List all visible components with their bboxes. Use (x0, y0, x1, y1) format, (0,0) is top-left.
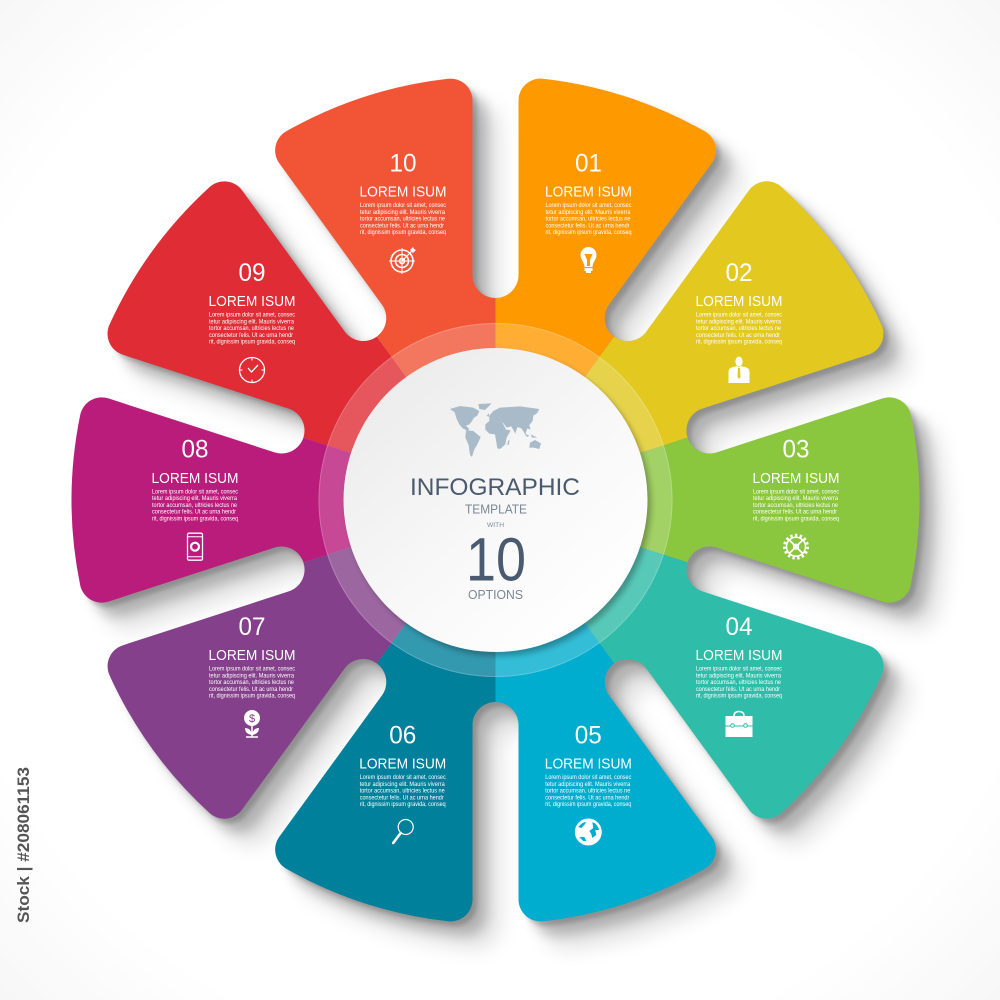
subtitle: TEMPLATE: TEMPLATE (465, 502, 527, 516)
segment 08: 08 (182, 436, 208, 464)
segment 07: tetur adipiscing elit. Mauris viverra (209, 673, 295, 679)
segment 07 (70, 370, 496, 841)
segment 01 (496, 79, 716, 500)
segment 06: 06 (389, 722, 416, 750)
segment 09: 09 (238, 259, 266, 287)
centre disc shadow (347, 352, 651, 656)
segment 10: 10 (390, 150, 416, 178)
segment 08: consectetur felis. Ut ac urna hendr (152, 510, 236, 516)
segment 09: consectetur felis. Ut ac urna hendr (209, 333, 293, 339)
icon: target (389, 247, 416, 274)
segment 04: 04 (726, 613, 753, 641)
segment 09: tortor accumsan, ultricies lectus ne (209, 326, 295, 332)
segment 08: Lorem ipsum dolor sit amet, consec (152, 489, 238, 495)
icon: briefcase (726, 712, 752, 737)
segment 06: Lorem ipsum dolor sit amet, consec (360, 775, 446, 781)
centre glass ring (318, 323, 672, 677)
segment 09: Lorem ipsum dolor sit amet, consec (209, 313, 295, 319)
segment 10: rit, dignissim ipsum gravida, conseq (360, 230, 446, 236)
segment 09: tetur adipiscing elit. Mauris viverra (209, 319, 295, 325)
segment 08: LOREM ISUM (152, 471, 238, 487)
icon: money plant: $ (249, 713, 255, 725)
icon: smartphone (188, 533, 202, 560)
segment 08 (27, 290, 496, 630)
segment 04: tetur adipiscing elit. Mauris viverra (696, 673, 782, 679)
segment 07: LOREM ISUM (208, 648, 296, 664)
segment 07: consectetur felis. Ut ac urna hendr (209, 687, 293, 693)
segment 05 (317, 500, 743, 970)
segment 03 (496, 370, 964, 710)
segment 06: consectetur felis. Ut ac urna hendr (360, 795, 444, 801)
label: WITH: WITH (487, 523, 504, 529)
segment 02: 02 (726, 259, 752, 287)
segment 09: rit, dignissim ipsum gravida, conseq (209, 340, 295, 346)
segment 06: LOREM ISUM (359, 757, 446, 773)
big number 10: 10 (466, 526, 526, 594)
segment 07: Lorem ipsum dolor sit amet, consec (209, 667, 295, 673)
segment 08: tortor accumsan, ultricies lectus ne (152, 503, 238, 509)
segment 01: tortor accumsan, ultricies lectus ne (546, 217, 631, 223)
icon: businessman (728, 356, 750, 383)
icon: money plant (244, 710, 260, 737)
segment 05: tortor accumsan, ultricies lectus ne (545, 789, 631, 795)
segment 04 (427, 500, 896, 840)
segment 06: tortor accumsan, ultricies lectus ne (360, 789, 445, 795)
segment 04: Lorem ipsum dolor sit amet, consec (696, 667, 782, 673)
segment 03: consectetur felis. Ut ac urna hendr (753, 510, 837, 516)
segment 06: tetur adipiscing elit. Mauris viverra (360, 782, 445, 788)
segment 05: rit, dignissim ipsum gravida, conseq (545, 802, 631, 808)
icon: clock (240, 358, 264, 382)
label: OPTIONS: OPTIONS (468, 588, 523, 602)
segment 08: tetur adipiscing elit. Mauris viverra (152, 496, 238, 502)
segment 10: tetur adipiscing elit. Mauris viverra (360, 210, 446, 216)
segment 10: consectetur felis. Ut ac urna hendr (360, 223, 444, 229)
segment 03: Lorem ipsum dolor sit amet, consec (753, 489, 839, 495)
segment 10: LOREM ISUM (360, 185, 446, 201)
segment 05: 05 (575, 722, 602, 750)
segment 07: tortor accumsan, ultricies lectus ne (209, 680, 295, 686)
segment 03: tortor accumsan, ultricies lectus ne (753, 503, 839, 509)
centre disc (344, 348, 648, 652)
segment 09 (95, 160, 564, 500)
segment 01: rit, dignissim ipsum gravida, conseq (546, 230, 632, 236)
segment 06: rit, dignissim ipsum gravida, conseq (360, 802, 446, 808)
segment 01: 01 (575, 150, 602, 178)
segment 10: Lorem ipsum dolor sit amet, consec (360, 203, 446, 209)
segment 02: LOREM ISUM (696, 294, 782, 310)
segment 04: tortor accumsan, ultricies lectus ne (696, 680, 782, 686)
icon: gear (784, 535, 808, 558)
icon: globe (575, 818, 602, 846)
segment 04: consectetur felis. Ut ac urna hendr (696, 687, 780, 693)
segment 01: tetur adipiscing elit. Mauris viverra (546, 210, 631, 216)
icon: light bulb (580, 247, 596, 273)
segment 02: rit, dignissim ipsum gravida, conseq (696, 340, 782, 346)
icon: magnifying glass (393, 820, 413, 843)
segment 04: LOREM ISUM (696, 648, 782, 664)
segment 02: tetur adipiscing elit. Mauris viverra (696, 319, 782, 325)
world map (450, 403, 541, 457)
segment 07: rit, dignissim ipsum gravida, conseq (209, 694, 295, 700)
segment 05: Lorem ipsum dolor sit amet, consec (545, 775, 631, 781)
segment 10: tortor accumsan, ultricies lectus ne (360, 217, 446, 223)
segment 01: consectetur felis. Ut ac urna hendr (546, 223, 630, 229)
segment 05: LOREM ISUM (545, 757, 632, 773)
segment 06 (275, 500, 496, 921)
segment 02: Lorem ipsum dolor sit amet, consec (696, 313, 782, 319)
segment 01: LOREM ISUM (545, 185, 632, 201)
segment 05: consectetur felis. Ut ac urna hendr (545, 795, 629, 801)
segment 03: rit, dignissim ipsum gravida, conseq (753, 516, 839, 522)
vertical image id: Stock | #208061153 (14, 767, 33, 923)
segment 04: rit, dignissim ipsum gravida, conseq (696, 694, 782, 700)
segment 10 (248, 30, 674, 500)
segment 08: rit, dignissim ipsum gravida, conseq (152, 516, 238, 522)
segment 02 (496, 159, 921, 630)
title: INFOGRAPHIC: INFOGRAPHIC (410, 474, 580, 501)
segment 03: tetur adipiscing elit. Mauris viverra (753, 496, 839, 502)
segment 09: LOREM ISUM (208, 294, 296, 310)
segment 02: tortor accumsan, ultricies lectus ne (696, 326, 782, 332)
segment 01: Lorem ipsum dolor sit amet, consec (546, 203, 632, 209)
segment 07: 07 (238, 613, 266, 641)
segment 03: 03 (782, 436, 810, 464)
segment 02: consectetur felis. Ut ac urna hendr (696, 333, 780, 339)
segment 03: LOREM ISUM (752, 471, 840, 487)
segment 05: tetur adipiscing elit. Mauris viverra (545, 782, 631, 788)
